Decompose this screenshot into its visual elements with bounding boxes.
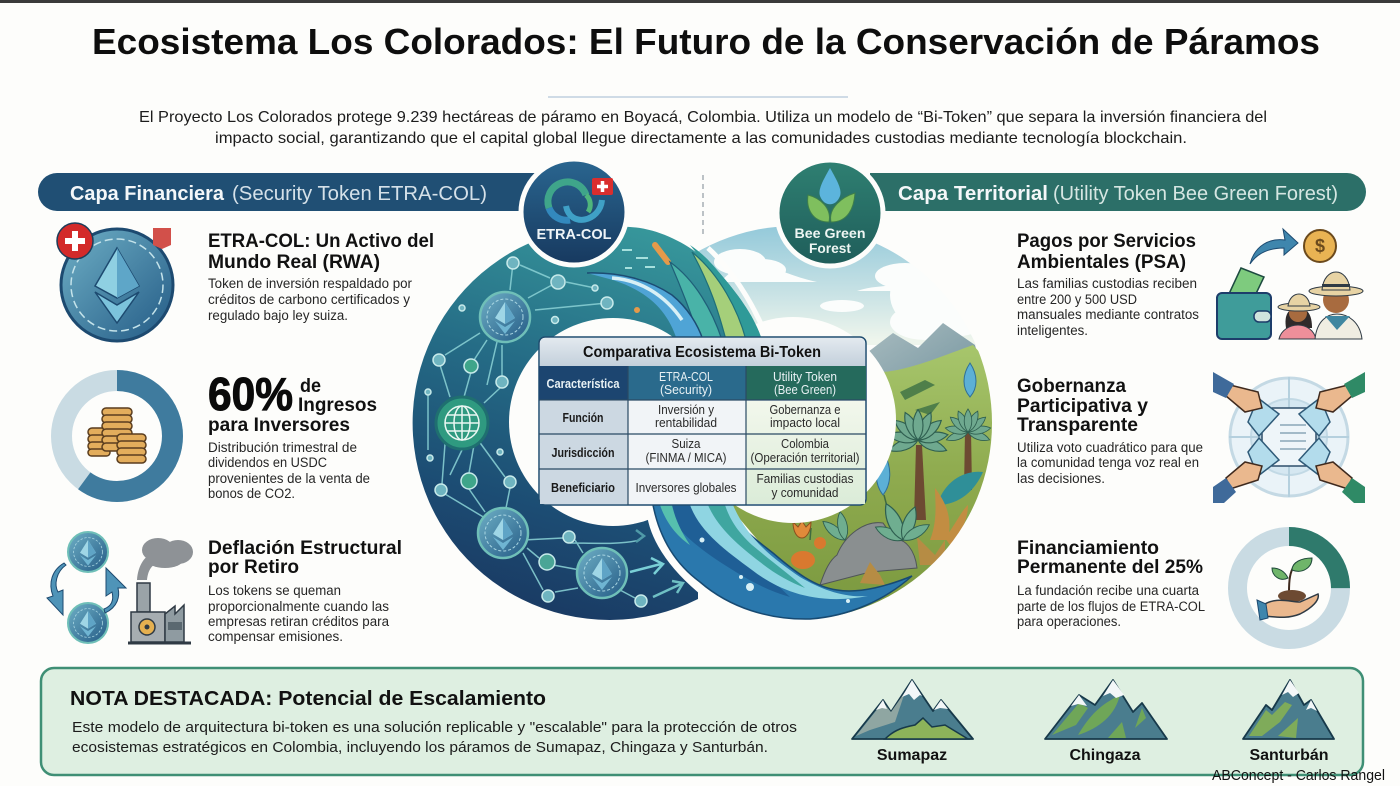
- text block: participative governance: la comunidad tenga voz real en: [1017, 455, 1199, 470]
- text block: 60% income: [208, 368, 377, 501]
- intro text: El Proyecto Los Colorados protege 9.239 hectáreas de páramo en Boyacá, Colombia. Utiliza un modelo de “Bi-Token” que separa la inversión financiera del: [139, 109, 1267, 126]
- table rows: Familias custodias: [756, 471, 854, 486]
- text block: PSA payments: mansuales mediante contratos: [1017, 307, 1199, 322]
- right pill heading: Capa Territorial: Capa Territorial: [898, 183, 1048, 205]
- badge: Bee Green Forest: Forest: [809, 241, 852, 256]
- territorial ring landscape: [698, 227, 992, 616]
- text block: permanent funding: Permanente del 25%: [1017, 557, 1203, 578]
- text block: PSA payments: [1017, 231, 1199, 338]
- text block: structural deflation: proporcionalmente cuando las: [208, 599, 389, 614]
- text block: permanent funding: para operaciones.: [1017, 614, 1121, 629]
- text block: 60% income: provenientes de la venta de: [208, 471, 370, 486]
- text block: participative governance: Transparente: [1017, 415, 1138, 436]
- text block: PSA payments: entre 200 y 500 USD: [1017, 292, 1137, 307]
- text block: structural deflation: empresas retiran créditos para: [208, 614, 389, 629]
- table header: Utility Token: [773, 369, 837, 384]
- icon: wallet, coin and family: [1217, 229, 1363, 339]
- credit line: ABConcept - Carlos Rangel: [1212, 767, 1385, 784]
- text block: ETRA-COL RWA: créditos de carbono certificados y: [208, 292, 410, 307]
- mountain: Santurbán: Santurbán: [1249, 747, 1329, 764]
- text block: 60% income: dividendos en USDC: [208, 455, 327, 470]
- icon: ETRA-COL coin: [57, 223, 173, 341]
- text block: ETRA-COL RWA: Token de inversión respaldado por: [208, 276, 412, 291]
- table rows: Función: [562, 410, 604, 425]
- mountain: Chingaza: Chingaza: [1069, 747, 1141, 764]
- text block: structural deflation: Deflación Estructural: [208, 538, 402, 559]
- central bi-token ring illustration: [412, 226, 992, 620]
- text block: permanent funding: Financiamiento: [1017, 538, 1159, 559]
- text block: 60% income: 60%: [208, 368, 293, 420]
- table rows: y comunidad: [772, 485, 838, 500]
- table header: [539, 366, 866, 400]
- donut chart: 60% investors: [62, 380, 172, 492]
- text block: PSA payments: inteligentes.: [1017, 323, 1088, 338]
- river stream bottom: [648, 505, 912, 623]
- text block: participative governance: Gobernanza: [1017, 376, 1126, 397]
- callout body: Este modelo de arquitectura bi-token es una solución replicable y "escalable" para la protección de otros: [72, 719, 797, 736]
- table rows: Inversores globales: [636, 480, 737, 495]
- text block: participative governance: las decisiones.: [1017, 471, 1105, 486]
- table rows: Jurisdicción: [552, 445, 615, 460]
- icon: coin stacks: [88, 408, 146, 463]
- text block: 60% income: de: [300, 376, 321, 397]
- comparison table: Comparativa Ecosistema Bi-Token: [583, 344, 821, 361]
- text block: 60% income: bonos de CO2.: [208, 486, 295, 501]
- callout body: ecosistemas estratégicos en Colombia, incluyendo los páramos de Sumapaz, Chingaza y Santurbán.: [72, 739, 768, 756]
- icon: wallet, coin and family: $: [1315, 236, 1325, 256]
- text block: permanent funding: [1017, 538, 1205, 629]
- mountain: Sumapaz: [852, 680, 973, 764]
- donut chart: 25% foundation: [1238, 536, 1340, 640]
- text block: participative governance: Utiliza voto cuadrático para que: [1017, 440, 1203, 455]
- text block: 60% income: para Inversores: [208, 415, 350, 436]
- left pill heading: Capa Financiera: (Security Token ETRA-COL): [232, 183, 487, 205]
- table rows: [539, 366, 866, 505]
- table rows: (Operación territorial): [750, 450, 860, 465]
- text block: ETRA-COL RWA: Mundo Real (RWA): [208, 252, 380, 273]
- table rows: (FINMA / MICA): [646, 450, 726, 465]
- right pill heading: Capa Territorial: (Utility Token Bee Green Forest): [1053, 183, 1338, 205]
- plants: [876, 363, 991, 545]
- badge: Bee Green Forest: Bee Green: [794, 226, 866, 241]
- teal stream detail: [622, 245, 668, 313]
- table header: (Security): [660, 382, 712, 397]
- icon: hand holding sprout: [1257, 558, 1318, 620]
- rocks: [820, 523, 917, 585]
- right pill heading: Capa Territorial: [870, 173, 1366, 211]
- text block: structural deflation: [208, 538, 402, 644]
- table header: (Bee Green): [774, 382, 836, 397]
- table rows: Inversión y: [658, 402, 714, 417]
- badge: Bee Green Forest: [777, 160, 883, 266]
- family: [1286, 308, 1312, 328]
- icon: token burn cycle and factory: [47, 532, 193, 643]
- icon: globe: [436, 397, 488, 449]
- text block: structural deflation: por Retiro: [208, 557, 299, 578]
- icon: four hands voting on a shared ledger: [1213, 372, 1365, 503]
- mountain: Santurbán: [1243, 680, 1334, 764]
- text block: ETRA-COL RWA: ETRA-COL: Un Activo del: [208, 231, 434, 252]
- table header: ETRA-COL: [659, 369, 713, 384]
- text block: ETRA-COL RWA: [208, 231, 434, 323]
- table rows: Gobernanza e: [770, 402, 840, 417]
- table header: Característica: [546, 376, 620, 391]
- badge: ETRA-COL: ETRA-COL: [536, 226, 612, 243]
- left pill heading: Capa Financiera: [38, 173, 535, 211]
- intro text: impacto social, garantizando que el capital global llegue directamente a las comunidades custodias mediante tecnología blockchain.: [215, 130, 1187, 147]
- text block: PSA payments: Ambientales (PSA): [1017, 252, 1186, 273]
- text block: PSA payments: Las familias custodias reciben: [1017, 276, 1197, 291]
- text block: 60% income: Distribución trimestral de: [208, 440, 357, 455]
- river stream top: [587, 245, 768, 340]
- callout body: [72, 719, 797, 756]
- text block: structural deflation: Los tokens se queman: [208, 583, 341, 598]
- comparison table: [539, 337, 866, 505]
- callout panel: scaling potential: [41, 668, 1363, 775]
- clouds: [714, 220, 1035, 340]
- callout heading: NOTA DESTACADA: Potencial de Escalamiento: [70, 688, 546, 710]
- text block: participative governance: [1017, 376, 1203, 486]
- text block: PSA payments: Pagos por Servicios: [1017, 231, 1196, 252]
- table rows: Suiza: [672, 436, 701, 451]
- financial ring: [413, 226, 762, 620]
- mountain: Sumapaz: Sumapaz: [877, 747, 947, 764]
- table rows: Colombia: [781, 436, 830, 451]
- flowers: [791, 521, 826, 569]
- title: Ecosistema Los Colorados: El Futuro de la Conservación de Páramos: [92, 21, 1320, 62]
- text block: permanent funding: La fundación recibe una cuarta: [1017, 583, 1199, 598]
- table rows: Beneficiario: [551, 480, 615, 495]
- left pill heading: Capa Financiera: Capa Financiera: [70, 183, 225, 205]
- mountain: Chingaza: [1045, 680, 1167, 764]
- text block: ETRA-COL RWA: regulado bajo ley suiza.: [208, 308, 348, 323]
- text block: participative governance: Participativa y: [1017, 396, 1148, 417]
- intro text: [139, 109, 1267, 147]
- text block: 60% income: Ingresos: [298, 395, 377, 416]
- table rows: impacto local: [770, 415, 840, 430]
- table title: [540, 338, 865, 366]
- text block: structural deflation: compensar emisiones.: [208, 629, 343, 644]
- text block: permanent funding: parte de los flujos de ETRA-COL: [1017, 599, 1205, 614]
- badge: ETRA-COL: [521, 159, 627, 265]
- table rows: rentabilidad: [655, 415, 717, 430]
